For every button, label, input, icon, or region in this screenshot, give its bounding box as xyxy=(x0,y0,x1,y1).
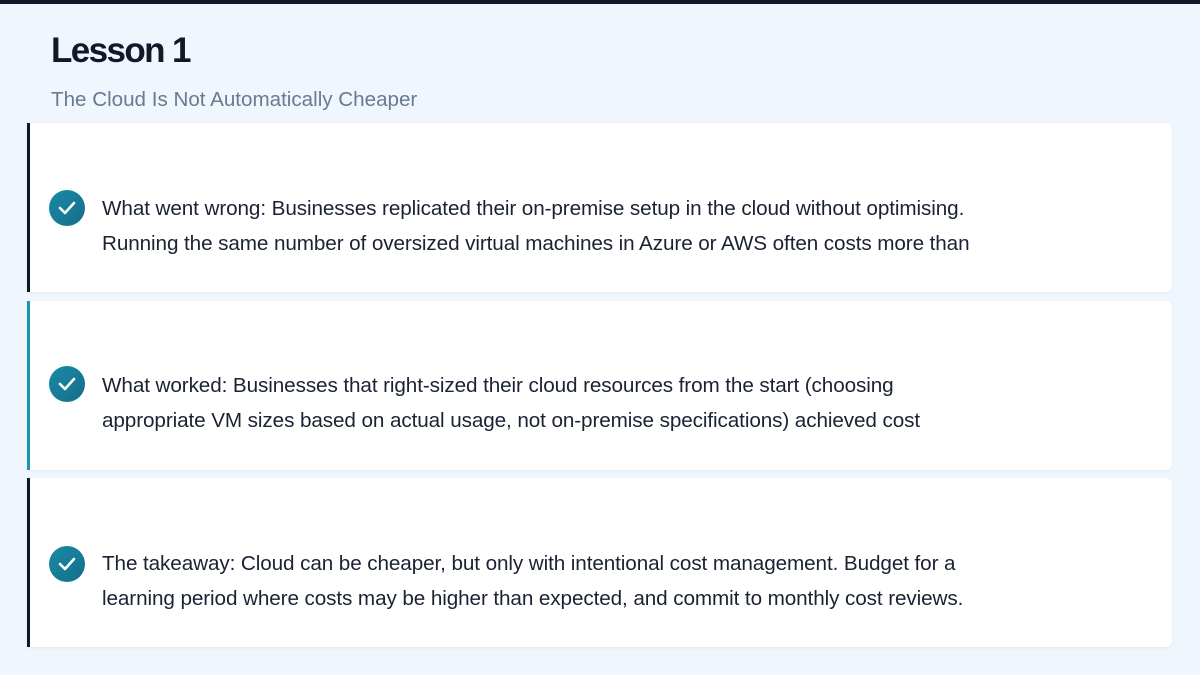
icon: check xyxy=(49,546,85,582)
panel: what worked xyxy=(27,301,1172,470)
icon: check xyxy=(49,366,85,402)
panel: takeaway xyxy=(27,478,1172,647)
subtitle: The Cloud Is Not Automatically Cheaper xyxy=(51,88,417,111)
text: takeaway: learning period where costs may be higher than expected, and commit to monthly cost reviews. xyxy=(102,587,963,610)
text: what went wrong: Running the same number of oversized virtual machines in Azure or AWS often costs more than xyxy=(102,232,969,255)
text: what went wrong xyxy=(102,197,969,255)
text: takeaway: The takeaway: Cloud can be cheaper, but only with intentional cost management. Budget for a xyxy=(102,552,955,575)
text: what worked: What worked: Businesses that right-sized their cloud resources from the start (choosing xyxy=(102,374,894,397)
text: what worked: appropriate VM sizes based on actual usage, not on-premise specifications) achieved cost xyxy=(102,409,920,432)
panel: what went wrong xyxy=(27,123,1172,292)
icon: check xyxy=(49,190,85,226)
title: Lesson 1 xyxy=(51,31,190,70)
text: what went wrong: What went wrong: Businesses replicated their on-premise setup in the cloud without optimising. xyxy=(102,197,964,220)
text: what worked xyxy=(102,374,920,432)
text: takeaway xyxy=(102,552,963,610)
